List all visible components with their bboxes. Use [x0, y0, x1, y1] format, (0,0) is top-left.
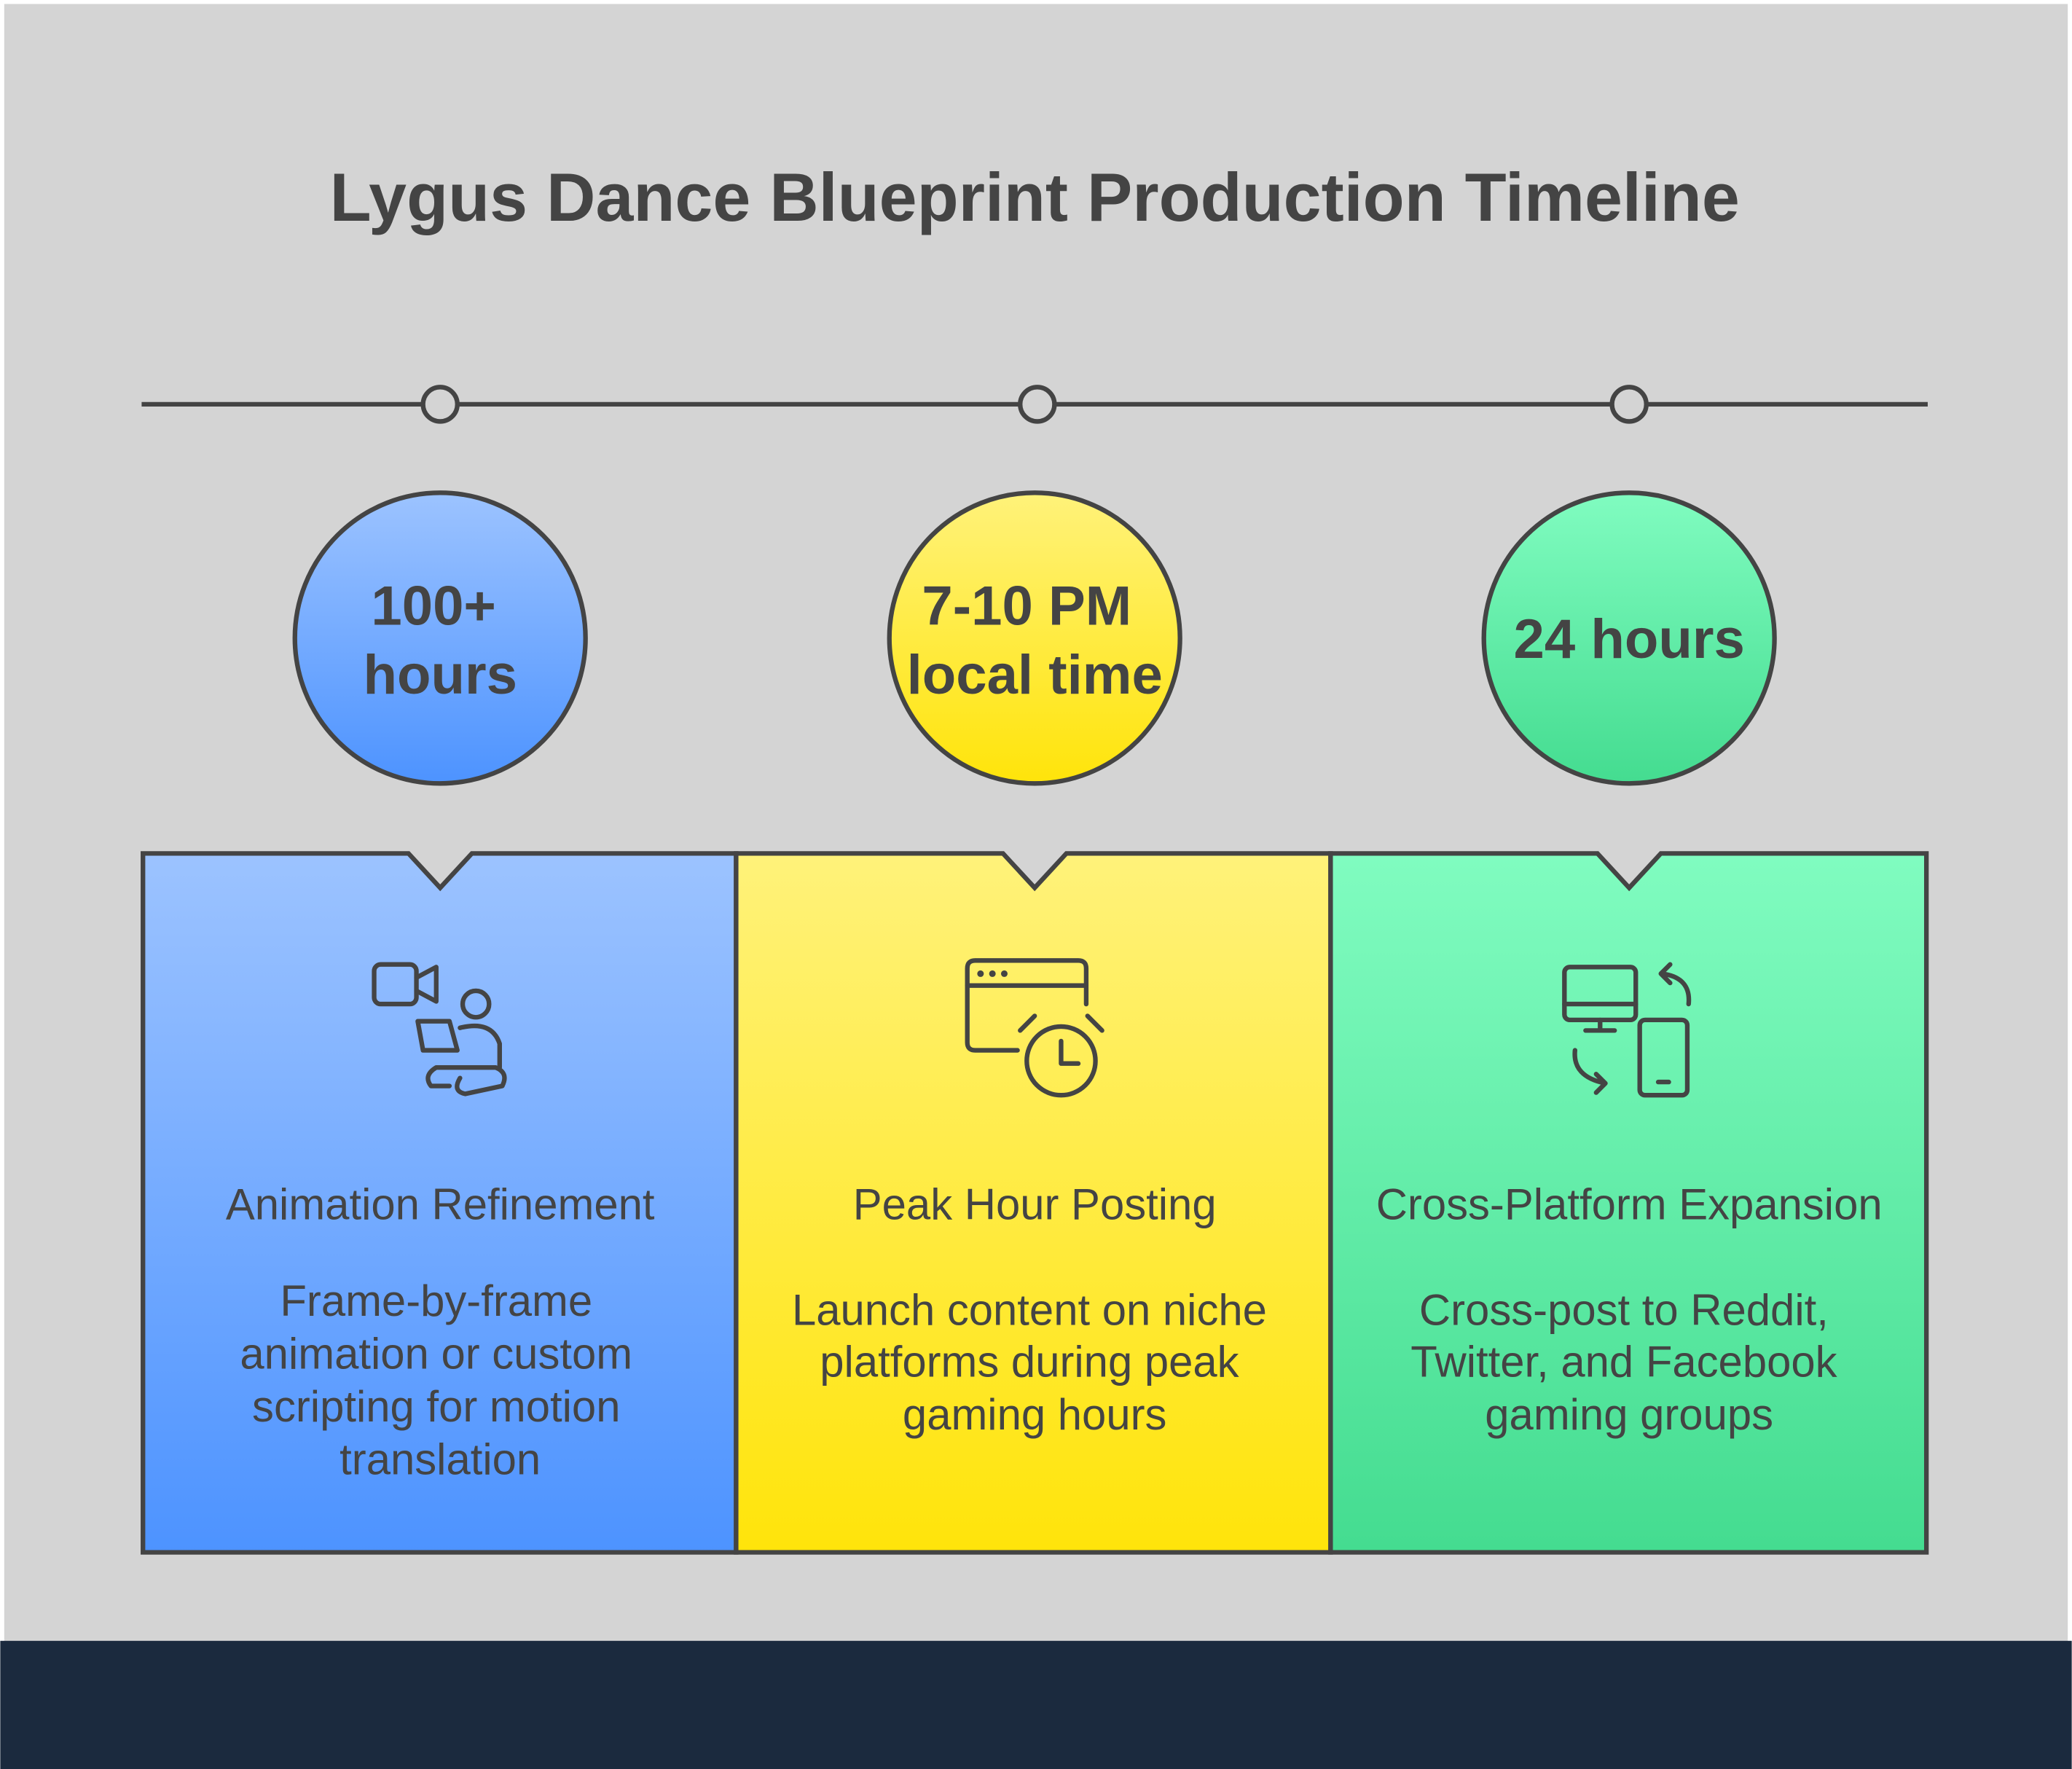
- panel: animation refinement: scripting for motion: [252, 1382, 620, 1431]
- circle: 24 hours: [1484, 493, 1775, 783]
- circle: 24 hours: 24 hours: [1513, 608, 1745, 670]
- circle: 7-10 PM local time: 7-10 PM: [922, 576, 1131, 638]
- timeline: [141, 387, 1928, 421]
- circle: 100+ hours: 100+: [371, 576, 496, 638]
- title: Lygus Dance Blueprint Production Timeline: [330, 159, 1740, 235]
- panel: peak hour posting: gaming hours: [903, 1390, 1166, 1439]
- footer band: [0, 1641, 2072, 1769]
- icon: animator: [374, 965, 504, 1094]
- panel: animation refinement: animation or custom: [240, 1330, 632, 1378]
- circle: 100+ hours: hours: [363, 644, 517, 706]
- panel: cross-platform expansion: Cross-post to Reddit,: [1419, 1286, 1829, 1335]
- circle: 7-10 PM local time: local time: [907, 644, 1163, 706]
- panel: cross-platform expansion: Cross-Platform Expansion: [1376, 1180, 1883, 1229]
- circle: 7-10 PM local time: [890, 493, 1180, 783]
- panel: animation refinement: Animation Refinement: [226, 1180, 655, 1229]
- panel: cross-platform expansion: gaming groups: [1485, 1390, 1773, 1439]
- panel: peak hour posting: [736, 853, 1330, 1553]
- panel: animation refinement: Frame-by-frame: [280, 1276, 592, 1325]
- panel: cross-platform expansion: [1330, 853, 1926, 1553]
- panel: cross-platform expansion: Twitter, and Facebook: [1410, 1337, 1837, 1386]
- panel: animation refinement: translation: [340, 1435, 541, 1484]
- panel: peak hour posting: Launch content on niche: [792, 1286, 1267, 1335]
- panel: animation refinement: [143, 853, 736, 1553]
- icon: browser with clock: [968, 960, 1102, 1095]
- icon: devices sync: [1564, 965, 1689, 1095]
- panel: peak hour posting: platforms during peak: [820, 1337, 1239, 1386]
- circle: 100+ hours: [295, 493, 586, 783]
- panel: peak hour posting: Peak Hour Posting: [853, 1180, 1217, 1229]
